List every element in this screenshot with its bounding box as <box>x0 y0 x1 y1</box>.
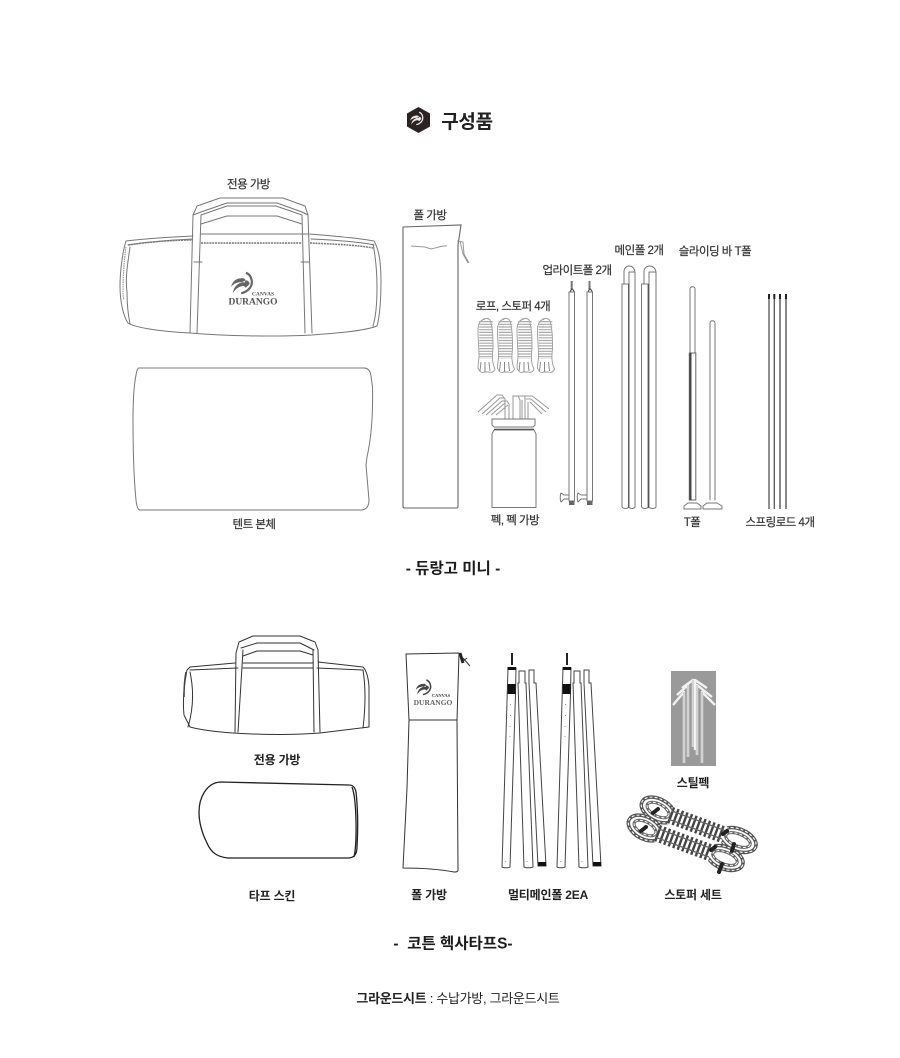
illustration: ropes <box>478 318 554 373</box>
illustration: pole bag <box>403 653 470 872</box>
illustration: pole bag <box>403 225 469 508</box>
label: upright poles: 업라이트폴 2개 <box>542 264 612 277</box>
label: sliding bar T pole: 슬라이딩 바 T폴 <box>679 245 751 258</box>
title: components: 구성품 <box>441 111 493 133</box>
label: tarp skin: 타프 스킨 <box>249 889 295 903</box>
label: peg and peg bag: 펙, 펙 가방 <box>491 514 540 527</box>
illustration: main poles <box>622 266 656 508</box>
label: multi main poles: 멀티메인폴 2EA <box>508 887 589 902</box>
illustration: steel pegs <box>671 671 716 766</box>
label: rope and stoppers: 로프, 스토퍼 4개 <box>476 300 550 313</box>
illustration: tarp skin <box>199 782 358 858</box>
illustration: pegs and peg bag <box>478 395 549 508</box>
illustration: stopper rope set <box>624 792 760 875</box>
label: main poles: 메인폴 2개 <box>615 244 663 257</box>
illustration: upright poles <box>560 281 592 505</box>
footer: groundsheet note: 그라운드시트 : 수납가방, 그라운드시트 <box>356 991 560 1006</box>
heading: Durango Mini: - 듀랑고 미니 - <box>406 560 500 578</box>
panel: Cotton Hexa Tarp S components <box>183 636 760 903</box>
illustration: pole bag: DURANGO <box>414 698 453 707</box>
illustration: tent body <box>133 368 373 510</box>
panel: Durango Mini components <box>120 178 815 531</box>
heading: Cotton Hexa Tarp S: - 코튼 헥사타프S- <box>393 934 513 952</box>
label: carry bag: 전용 가방 <box>254 752 300 767</box>
label: pole bag: 폴 가방 <box>411 887 447 902</box>
illustration: multi main poles <box>502 653 601 868</box>
illustration: carry bag <box>183 636 369 734</box>
label: steel pegs: 스틸펙 <box>677 776 709 790</box>
illustration: T poles <box>684 287 722 509</box>
icon: hexagon scorpion badge <box>407 107 430 133</box>
label: stopper set: 스토퍼 세트 <box>664 888 722 902</box>
illustration: spring rods <box>769 294 786 509</box>
label: carry bag: 전용 가방 <box>227 178 271 191</box>
illustration: carry bag <box>120 198 381 336</box>
illustration: carry bag: DURANGO <box>228 298 278 308</box>
label: tent body: 텐트 본체 <box>232 518 276 531</box>
label: spring rods: 스프링로드 4개 <box>745 516 815 529</box>
illustration: carry bag: CANVAS <box>252 292 274 298</box>
label: pole bag: 폴 가방 <box>414 209 447 222</box>
illustration: pole bag: CANVAS <box>432 693 451 698</box>
label: T pole: T폴 <box>684 516 700 529</box>
